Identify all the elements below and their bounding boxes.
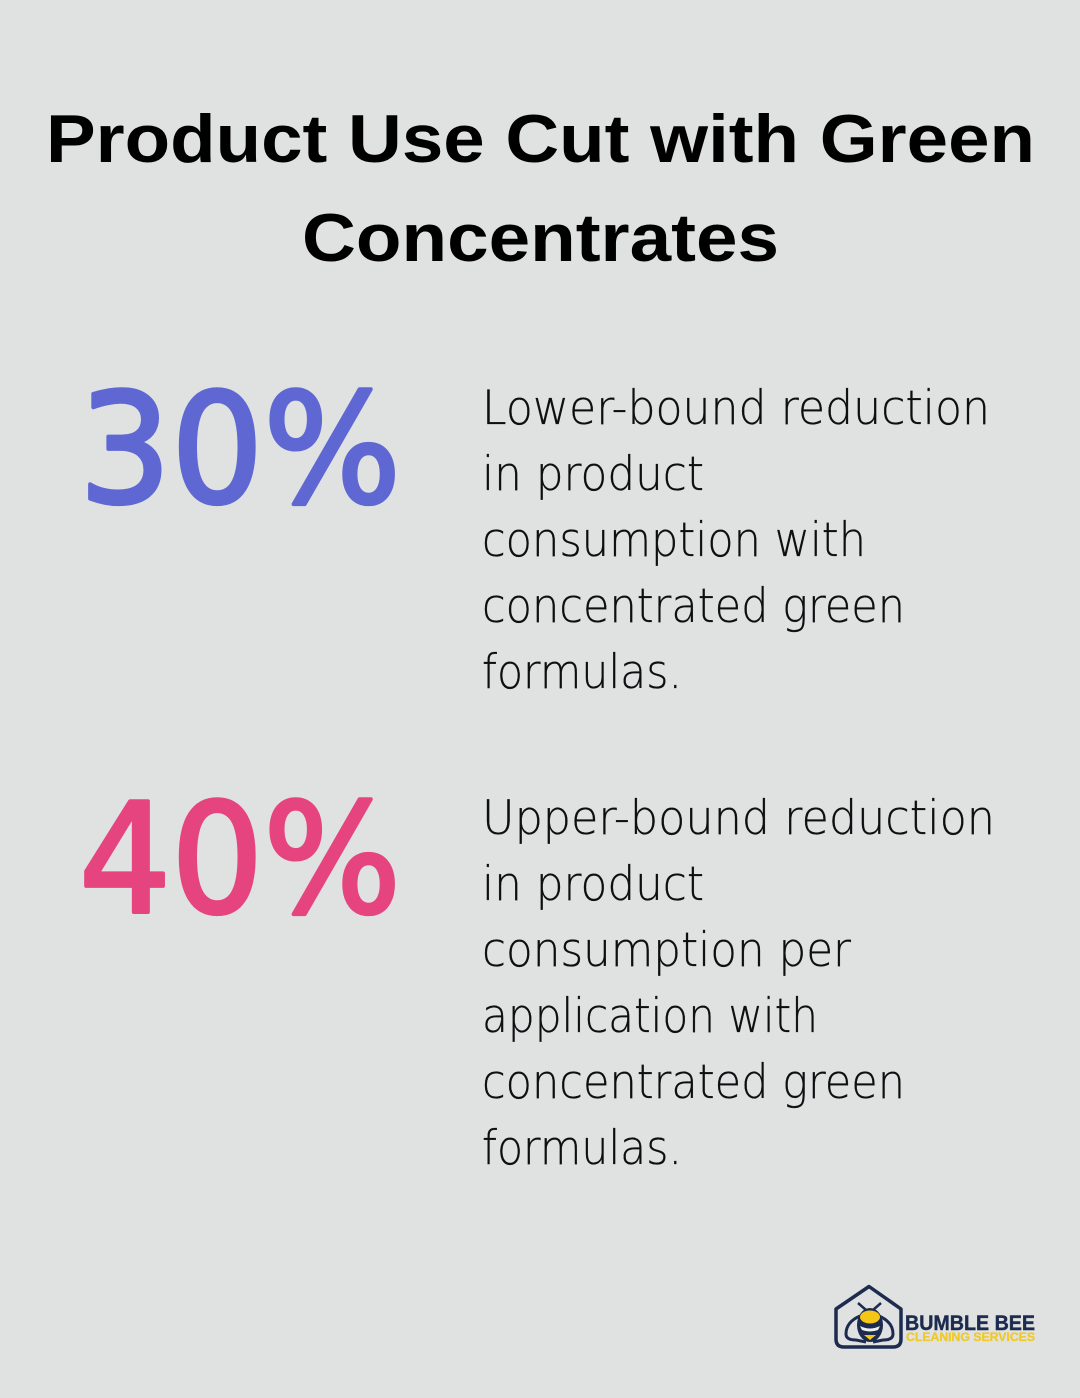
stat: 40%: 40%	[79, 771, 401, 948]
icon: house with bee	[836, 1286, 901, 1347]
title	[46, 101, 1035, 276]
description: 40% stat	[482, 791, 995, 1176]
logo: Bumble Bee Cleaning Services	[836, 1286, 1035, 1347]
description: 40% stat: Upper-bound reduction	[482, 791, 995, 846]
description: 30% stat: concentrated green	[482, 579, 905, 634]
description: 40% stat: in product	[482, 857, 704, 912]
title: Concentrates	[302, 200, 779, 276]
logo tagline: CLEANING SERVICES	[906, 1330, 1035, 1344]
description: 30% stat: Lower-bound reduction	[482, 381, 990, 436]
description: 30% stat: consumption with	[482, 513, 866, 568]
logo wordmark: BUMBLE BEE	[905, 1312, 1035, 1335]
stat: 30%: 30%	[79, 361, 401, 538]
description: 30% stat: in product	[482, 447, 704, 502]
title: Product Use Cut with Green	[46, 101, 1035, 177]
description: 40% stat: formulas.	[482, 1121, 682, 1176]
description: 40% stat: concentrated green	[482, 1055, 905, 1110]
description: 40% stat: application with	[482, 989, 818, 1044]
description: 40% stat: consumption per	[482, 923, 852, 978]
description: 30% stat: formulas.	[482, 645, 682, 700]
description: 30% stat	[482, 381, 990, 700]
